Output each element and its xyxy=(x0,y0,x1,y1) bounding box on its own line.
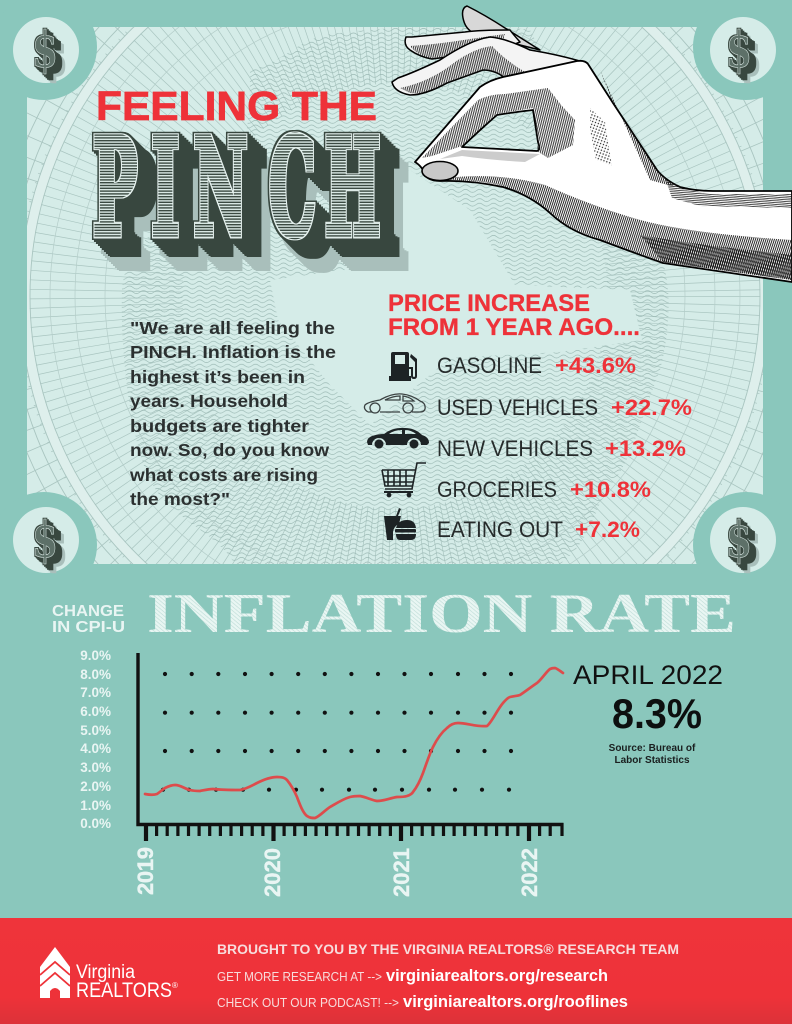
y axis labels: 9.0% xyxy=(80,648,111,663)
icon: dollar top left: $ xyxy=(32,22,58,79)
text block: quote: years. Household xyxy=(130,391,288,411)
label: change in cpi-u: CHANGE xyxy=(52,603,124,620)
callout: april 2022: APRIL 2022 xyxy=(573,660,723,690)
year labels: 2021 xyxy=(389,848,414,897)
heading: pinch xyxy=(93,111,380,266)
panel: footer xyxy=(0,918,792,1024)
text block: quote: what costs are rising xyxy=(129,465,318,485)
heading: pinch: I xyxy=(152,111,179,266)
year labels: 2019 xyxy=(133,847,158,895)
icon: shopping cart xyxy=(382,463,426,497)
icon: burger and drink xyxy=(384,508,416,540)
corner notches xyxy=(0,0,792,598)
callout: april 2022 xyxy=(573,660,723,766)
y axis labels: 8.0% xyxy=(80,667,111,682)
list: new vehicles xyxy=(367,428,686,461)
axes and ticks xyxy=(138,653,564,824)
y axis labels: 7.0% xyxy=(80,685,111,700)
callout: april 2022: Labor Statistics xyxy=(614,755,690,766)
year labels xyxy=(133,847,542,897)
heading: pinch: P xyxy=(93,111,137,266)
label: change in cpi-u: IN CPI-U xyxy=(52,619,125,636)
panel: banknote xyxy=(27,27,763,564)
logo: virginia realtors: REALTORS xyxy=(76,979,172,1002)
icon: dollar bottom right xyxy=(710,507,776,573)
y axis labels: 2.0% xyxy=(80,779,111,794)
y axis labels: 5.0% xyxy=(80,723,111,738)
icon: gas pump xyxy=(389,352,417,381)
text block: quote: now. So, do you know xyxy=(130,440,329,460)
text block: quote: highest it’s been in xyxy=(130,367,305,387)
red data line xyxy=(145,668,563,818)
heading: pinch: C xyxy=(269,111,316,266)
callout: april 2022: Source: Bureau of xyxy=(609,743,696,754)
list: gasoline: GASOLINE xyxy=(437,353,542,378)
text block: quote: budgets are tighter xyxy=(130,416,309,436)
list: groceries xyxy=(382,463,651,502)
footer research link: GET MORE RESEARCH AT --> xyxy=(217,970,382,984)
icon: solid car xyxy=(367,428,429,445)
icon: dollar top left xyxy=(13,17,79,83)
callout: april 2022: 8.3% xyxy=(612,690,702,737)
logo: virginia realtors: Virginia xyxy=(76,962,135,983)
year labels: 2022 xyxy=(517,848,542,897)
year labels: 2020 xyxy=(260,848,285,897)
list: used vehicles: USED VEHICLES xyxy=(437,395,598,420)
text block: quote: "We are all feeling the xyxy=(130,318,335,338)
list: new vehicles: NEW VEHICLES xyxy=(437,436,593,461)
footer research link: virginiarealtors.org/research xyxy=(386,967,608,985)
icon: dollar bottom right: $ xyxy=(726,512,752,569)
logo: virginia realtors: ® xyxy=(172,981,178,990)
y axis labels: 1.0% xyxy=(80,798,111,813)
footer podcast link: CHECK OUT OUR PODCAST! --> xyxy=(217,996,399,1010)
footer credit: BROUGHT TO YOU BY THE VIRGINIA REALTORS® RESEARCH TEAM xyxy=(217,942,679,957)
list: used vehicles xyxy=(364,394,692,420)
heading: pinch: H xyxy=(325,111,380,266)
heading: price increase: PRICE INCREASE xyxy=(388,290,590,317)
icon: dollar bottom left xyxy=(13,507,79,573)
text block: quote: PINCH. Inflation is the xyxy=(130,342,336,362)
heading: inflation rate: INFLATION RATE xyxy=(147,583,736,645)
y axis labels xyxy=(80,648,111,831)
list: eating out: EATING OUT xyxy=(437,517,563,542)
y axis labels: 6.0% xyxy=(80,704,111,719)
y axis labels: 0.0% xyxy=(80,816,111,831)
footer podcast link: virginiarealtors.org/rooflines xyxy=(403,993,628,1011)
icon: dollar bottom left: $ xyxy=(32,512,58,569)
icon: dollar top right: $ xyxy=(726,22,752,79)
grid dots xyxy=(161,672,513,792)
icon: car outline xyxy=(364,394,425,413)
heading: price increase: FROM 1 YEAR AGO.... xyxy=(388,314,640,341)
y axis labels: 4.0% xyxy=(80,741,111,756)
list: new vehicles: +13.2% xyxy=(605,436,686,461)
heading: feeling the: FEELING THE xyxy=(96,83,377,129)
list: eating out: +7.2% xyxy=(575,517,640,542)
y axis labels: 3.0% xyxy=(80,760,111,775)
list: eating out xyxy=(384,508,640,542)
icon: dollar top right xyxy=(710,17,776,83)
logo: virginia realtors xyxy=(40,947,178,1002)
list: groceries: +10.8% xyxy=(570,477,651,502)
list: gasoline: +43.6% xyxy=(555,353,636,378)
heading: pinch: N xyxy=(194,111,247,266)
illustration: pinching hand xyxy=(392,6,792,282)
list: gasoline xyxy=(389,352,636,381)
chart: inflation rate line xyxy=(80,648,564,897)
list: groceries: GROCERIES xyxy=(437,477,557,502)
list: used vehicles: +22.7% xyxy=(611,395,692,420)
text block: quote: the most?" xyxy=(130,489,230,509)
